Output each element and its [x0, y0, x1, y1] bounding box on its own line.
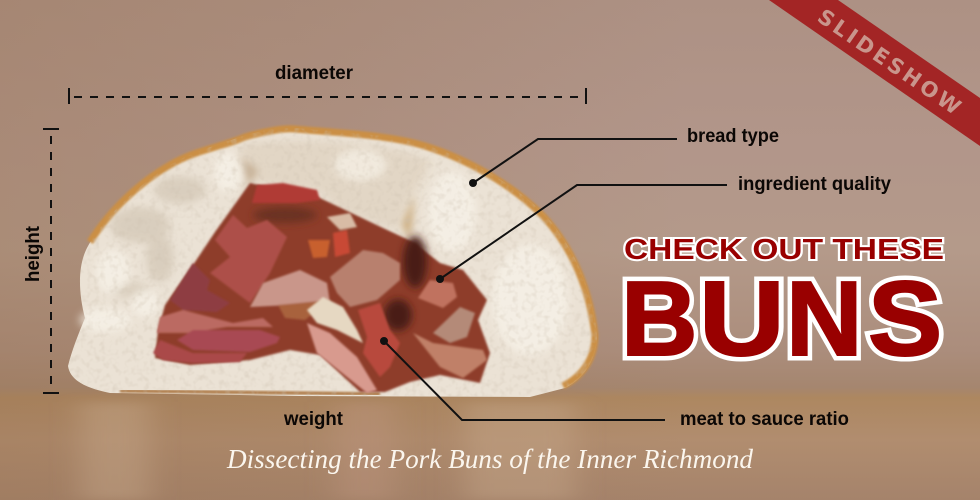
callout: meat to sauce ratio — [380, 337, 849, 430]
crumb texture — [60, 120, 605, 405]
table reflection of the bun — [80, 402, 575, 500]
label: diameter: diameter — [275, 63, 354, 84]
filling: pale pork shreds — [250, 213, 487, 393]
crumb: mottled shadow patches — [110, 176, 206, 298]
bun body: crumb — [68, 128, 597, 397]
crust: top and right edge — [90, 129, 595, 386]
label: bread type: bread type — [687, 126, 779, 147]
headline line 2 — [621, 259, 942, 378]
headline: check out these buns — [621, 234, 944, 378]
crust underside — [120, 391, 380, 394]
label: meat to sauce ratio: meat to sauce ratio — [680, 409, 849, 430]
headline line 2: S — [868, 260, 942, 378]
photo: sliced pork bun — [60, 120, 605, 405]
crumb: top section shading — [240, 141, 430, 230]
headline line 2: N — [786, 260, 863, 378]
headline line 2: B — [621, 260, 698, 378]
headline line 2: U — [699, 259, 785, 378]
crumb: bright highlights — [79, 149, 568, 355]
callout: ingredient quality — [436, 174, 891, 283]
filling: sauce base — [155, 183, 490, 392]
filling: red pork chunks — [153, 183, 400, 377]
label: height: height — [23, 225, 44, 282]
headline line 2: S — [868, 260, 942, 378]
subtitle: Dissecting the Pork Buns of the Inner Richmond — [226, 444, 753, 474]
crumb: seam between top and left — [228, 150, 258, 200]
headline line 2: N — [786, 260, 863, 378]
label: ingredient quality: ingredient quality — [738, 174, 891, 195]
label: weight: weight — [283, 409, 344, 430]
ribbon label: SLIDESHOW — [813, 4, 965, 120]
headline line 1: CHECK OUT THESE — [624, 234, 944, 266]
filling: dark sauce pockets — [253, 207, 427, 331]
ribbon: slideshow — [769, 0, 980, 146]
headline line 2: U — [699, 259, 785, 378]
bread patch inside the filling — [307, 297, 363, 343]
callout: bread type — [469, 126, 779, 187]
crumb: seam between top and right — [402, 160, 432, 240]
headline line 2: B — [621, 260, 698, 378]
